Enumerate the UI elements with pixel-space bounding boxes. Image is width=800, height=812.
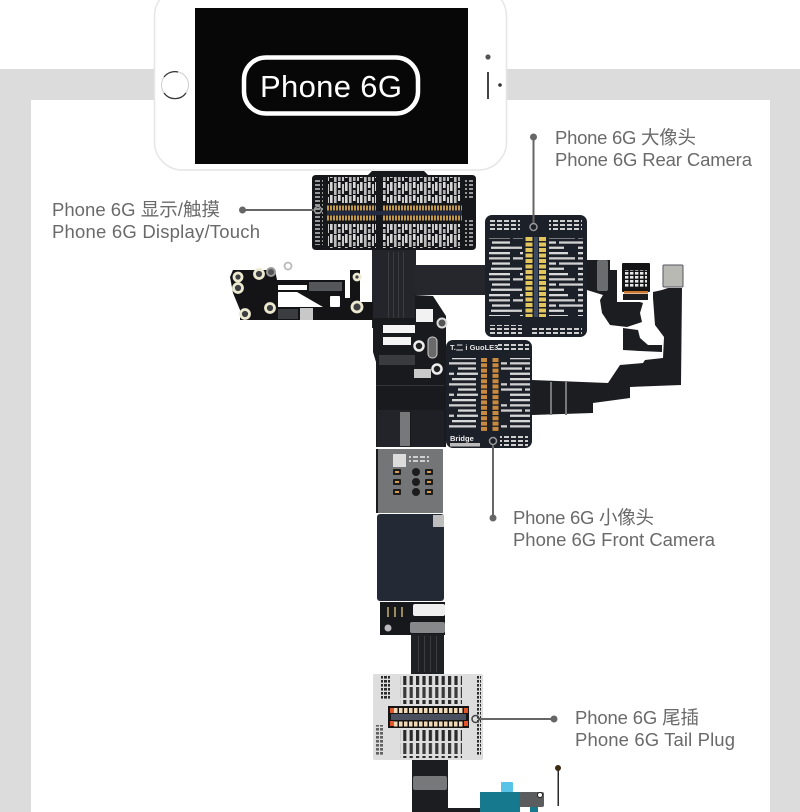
label: display and touch [52, 199, 260, 242]
front camera flex [532, 265, 683, 415]
rear camera flex and module [587, 260, 650, 327]
bracket with screws [230, 262, 373, 320]
label: front camera [513, 507, 716, 550]
display and touch connector board [312, 171, 476, 250]
front camera connector board [446, 340, 532, 448]
label: rear camera: Phone 6G 大像头 [555, 127, 696, 148]
label: display and touch: Phone 6G 显示/触摸 [52, 199, 220, 220]
phone mockup title [154, 0, 506, 170]
label: tail plug [575, 707, 735, 750]
label: front camera: Phone 6G Front Camera [513, 529, 716, 550]
label: front camera: Phone 6G 小像头 [513, 507, 654, 528]
label: rear camera [555, 127, 753, 170]
tail plug flex and dock [412, 760, 561, 812]
callout leader: front camera [490, 438, 496, 522]
callout leader: rear camera [530, 134, 537, 230]
callout leader: tail plug [472, 716, 558, 722]
rear camera connector board [485, 215, 587, 337]
dark chip shield [377, 514, 444, 601]
metal SIM shield [376, 449, 443, 513]
front camera connector board: T.二 i GuoLE3 [450, 343, 498, 352]
main flex and logic board [372, 248, 487, 447]
lower flex cable [411, 634, 444, 674]
lower board [380, 602, 445, 635]
label: display and touch: Phone 6G Display/Touch [52, 221, 260, 242]
callout leader: display and touch [239, 206, 322, 214]
label: rear camera: Phone 6G Rear Camera [555, 149, 753, 170]
label: tail plug: Phone 6G Tail Plug [575, 729, 735, 750]
tail plug connector board [373, 674, 483, 760]
label: tail plug: Phone 6G 尾插 [575, 707, 699, 728]
phone mockup title: Phone 6G [260, 69, 402, 104]
front camera connector board: Bridge [450, 434, 474, 443]
